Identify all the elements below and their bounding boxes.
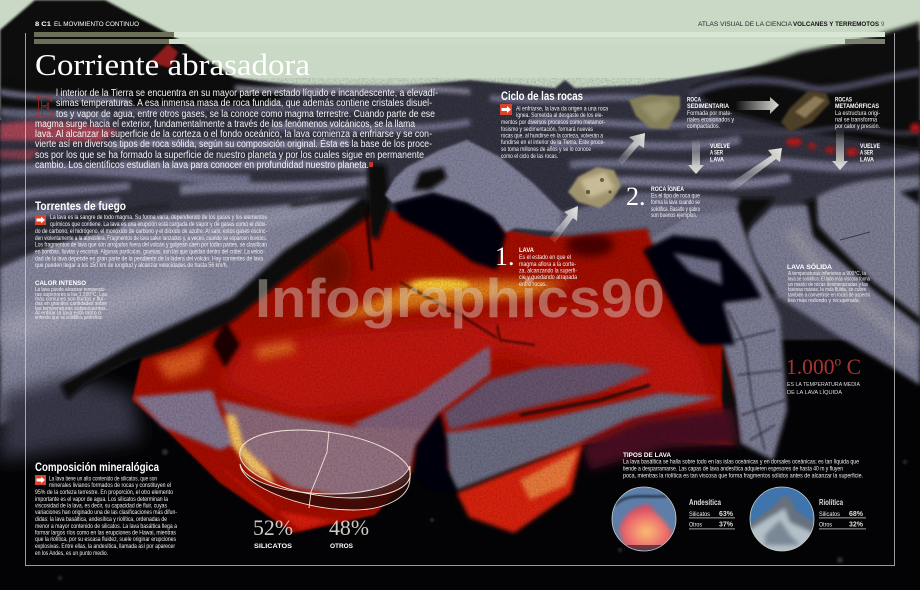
panel: tipos de lava: TIPOS DE LAVA: [623, 452, 672, 459]
central dome gray: [385, 140, 563, 233]
panel: composicion mineralogica: didas: la lava basáltica, andesítica y riolítica, ordenadas de: [35, 516, 167, 523]
label: roca sedimentaria: Formada por mate-: [687, 110, 732, 117]
watermark: Infographics90: [255, 267, 665, 329]
panel: lava solida: LAVA SÓLIDA: [787, 263, 833, 271]
crust center: [220, 347, 489, 500]
label: roca ignea: forma la lava cuando se: [651, 199, 700, 206]
glowing red spots right: [786, 123, 920, 156]
table: andesitica: [689, 498, 735, 529]
panel: ciclo de las rocas: Ciclo de las rocas: [501, 89, 583, 103]
label: lava: 1.: [495, 242, 514, 271]
label: vuelve a ser lava 1: A SER: [710, 150, 723, 156]
label: lava: magma aflora a la corte-: [519, 261, 576, 268]
panel: lava solida: también a convertirse en rocas de aspecto: [788, 292, 870, 298]
table: andesitica: Otros: [689, 522, 702, 528]
right rope above cavity: [560, 192, 740, 238]
pie top: [235, 420, 415, 508]
table: andesitica: 63%: [719, 511, 734, 518]
table: riolitica: Silicatos: [819, 511, 840, 518]
icon: arrow badge: [35, 475, 46, 485]
panel: calor intenso: las temperaturas subsecuentes.: [35, 306, 107, 312]
brighter red lower: [200, 450, 370, 530]
black lobe edge left: [60, 196, 378, 400]
cavity red: [132, 208, 734, 533]
table: andesitica: 37%: [719, 522, 734, 528]
panel: composicion mineralogica: Composición mineralógica: [35, 460, 159, 474]
label: roca sedimentaria: riales erosionados y: [687, 116, 735, 124]
label: rocas metamorficas: nal se transforma: [835, 116, 877, 124]
panel: ciclo de las rocas: Al enfriarse, la lava da origen a una roca: [516, 106, 608, 112]
label: lava: za, alcanzando la superfi-: [519, 268, 577, 274]
label: roca sedimentaria: SEDIMENTARIA: [687, 103, 729, 110]
light rope stripes: [0, 72, 920, 222]
pie labels: 52%: [253, 515, 293, 540]
panel: tipos de lava: La lava basáltica se halla sobre todo en las islas oceánicas y en dorsales oceánicas; es tan líquida que: [623, 458, 859, 466]
table: riolitica: Otros: [819, 522, 832, 528]
label: rocas metamorficas: por calor y presión.: [835, 123, 880, 130]
table: andesitica: Silicatos: [689, 511, 710, 518]
pie labels: [253, 515, 369, 550]
panel: torrentes de fuego: La lava es la sangre de todo magma. Su forma varía, dependiendo de los gases y los elementos: [50, 214, 267, 221]
panel: lava solida: liso más redondo y recuperada.: [788, 298, 860, 304]
panel: torrentes de fuego: do de carbono, el hidrógeno, el monóxido de carbono y el dióxido de azufre. Al salir, estos gases escinc-: [35, 228, 267, 235]
rock: ignea: [568, 167, 621, 208]
label: vuelve a ser lava 1: VUELVE: [710, 143, 730, 150]
black cracks: [366, 210, 535, 345]
label: lava: [495, 242, 577, 288]
pie labels: SILICATOS: [254, 543, 292, 550]
label: vuelve a ser lava 2: VUELVE: [860, 143, 880, 150]
label: vuelve a ser lava 1: LAVA: [710, 156, 724, 164]
arrow: metamorfica vuelve a lava: [832, 130, 848, 170]
label: roca ignea: 2.: [626, 182, 646, 211]
panel: tipos de lava: tiende a desparramarse. Las capas de lava andesítica adquieren espesores de hasta 40 m y fluyen: [623, 466, 843, 472]
panel: torrentes de fuego: químicos que contiene. La lava es una erupción está cargada de vapor y de gases como el dióxi-: [50, 221, 267, 228]
table: riolitica: Riolítica: [819, 498, 843, 507]
arrow: ignea to metamorfica: [726, 148, 782, 192]
arrow: ignea to sedimentaria: [617, 133, 645, 165]
lower red lava patch: [457, 443, 583, 533]
orange glow left: [155, 345, 208, 380]
red streak on mountain: [150, 44, 178, 68]
panel: lava solida: un manto de rocas desmenuzadas y las: [788, 282, 868, 288]
title: Corriente abrasadora: [35, 47, 310, 82]
label: rocas metamorficas: METAMÓRFICAS: [835, 102, 879, 110]
panel: tipos de lava: [623, 452, 863, 480]
panel: calor intenso: más comunes son fluidas y fluí-: [35, 296, 105, 302]
label: roca ignea: son buenos ejemplos.: [651, 212, 697, 219]
pie divider: [309, 431, 329, 508]
left pink glow streak: [0, 121, 120, 142]
dark red shadow: [566, 233, 614, 257]
label: roca sedimentaria: compactados.: [687, 123, 720, 130]
panel: torrentes de fuego: dad de la lava depende en gran parte de la pendiente de la ladera del volcán. Hay corrientes de lava: [35, 256, 263, 262]
lobe A shadow bottom: [722, 345, 745, 455]
intro paragraph: vierte así en diversos tipos de roca sólida, según su composición original. Ésta es la base de los proce-: [35, 137, 432, 150]
header left: section label: 8 C1: [35, 22, 52, 28]
sky: [0, 0, 920, 120]
callout: 1000 degrees: [786, 354, 861, 396]
table: riolitica: [819, 498, 866, 529]
icon: arrow badge: [35, 215, 46, 225]
yellow glow: [330, 280, 570, 322]
label: lava: Es el estado en que el: [519, 254, 571, 261]
label: lava: entre rocas.: [519, 281, 547, 288]
panel: ciclo de las rocas: fosismo y sedimentación, formará nuevas: [501, 126, 593, 133]
table: andesitica: Andesítica: [689, 498, 721, 507]
panel: tipos de lava: poca, mientras la riolítica es tan viscosa que forma fragmentos sólidos antes de alcanzar la superficie.: [623, 472, 863, 480]
intro paragraph: cambio. Los científicos estudian la lava para conocer en profundidad nuestro planeta.: [35, 160, 369, 171]
header bars: [34, 32, 885, 44]
panel: ciclo de las rocas: so toma millones de años y se lo conoce: [501, 146, 591, 153]
gap A-B: [733, 198, 776, 300]
pie labels: OTROS: [330, 543, 353, 550]
label: rocas metamorficas: ROCAS: [835, 96, 852, 104]
header left: section label: EL MOVIMIENTO CONTINUO: [54, 22, 139, 28]
intro paragraph: l interior de la Tierra se encuentra en su mayor parte en estado líquido e incandescente, a elevadí-: [56, 88, 438, 99]
panel: torrentes de fuego: Los fragmentos de lava que son arrojados fuera del volcán y golpean caen por todas partes, se clasifican: [35, 242, 267, 248]
panel: composicion mineralogica: minerales livianos formados de rocas y constituyen el: [49, 482, 171, 489]
arrow: sedimentaria vuelve a lava: [688, 140, 704, 174]
arrow: lava to ignea: [549, 206, 578, 243]
dome black underside: [393, 193, 506, 270]
drop cap: E: [35, 88, 55, 124]
panel: ciclo de las rocas: fundirse en el interior de la Tierra. Este proce-: [501, 139, 605, 146]
intro paragraph: simas temperaturas. A esa inmensa masa de roca fundida, que además contiene cristales disuel-: [56, 98, 432, 109]
panel: composicion mineralogica: viscosidad de la lava, es decir, su capacidad de fluir, cuyas: [35, 502, 167, 510]
table: riolitica: 68%: [849, 511, 864, 518]
crust right lower: [444, 393, 718, 490]
panel: calor intenso: CALOR INTENSO: [35, 280, 86, 287]
rock: sedimentaria: [629, 95, 680, 129]
panel: calor intenso: ras superiores a los 1.200°C. Las: [35, 292, 107, 298]
label: vuelve a ser lava 2: A SER: [860, 150, 873, 156]
table: riolitica: 32%: [849, 522, 864, 528]
lobe C far right: [815, 176, 920, 320]
right dark ridge: [690, 22, 920, 150]
label: roca ignea: ROCA ÍGNEA: [651, 185, 684, 193]
label: roca sedimentaria: ROCA: [687, 96, 701, 104]
left big gray lobe: [0, 198, 365, 425]
label: vuelve a ser lava 2: [860, 143, 880, 164]
header right: atlas label: [698, 22, 885, 28]
lobe A black inner: [643, 235, 762, 345]
panel: ciclo de las rocas: como el ciclo de las rocas.: [501, 153, 558, 160]
pie labels: 48%: [329, 515, 369, 540]
label: roca ignea: [626, 182, 700, 219]
speckled bottom: [58, 449, 907, 580]
label: roca sedimentaria: [687, 96, 735, 130]
panel: composicion mineralogica: explosivas. Entre ellas, la andesítica, llamada así por aparecer: [35, 543, 175, 550]
callout: 1000 degrees: 1.000º C: [786, 354, 861, 379]
panel: calor intenso: La lava puede alcanzar temperatu-: [35, 287, 106, 293]
panel: ciclo de las rocas: ígnea. Sometida al desgaste de los ele-: [516, 112, 603, 119]
crust lower right dark: [582, 408, 738, 470]
panel: composicion mineralogica: formar largos ríos como en las erupciones de Hawai, mientras: [35, 530, 176, 536]
left dark mountain: [0, 0, 300, 118]
panel: lava solida: [787, 263, 870, 304]
intro paragraph: tos y vapor de agua, entre otros gases, se la conoce como magma terrestre. Cuando parte de ese: [56, 109, 435, 120]
panel: torrentes de fuego: que pueden llegar a los 150 km de longitud y alcanzar velocidades de hasta 56 km/h.: [35, 262, 228, 269]
label: roca ignea: Es el tipo de roca que: [651, 192, 700, 200]
panel: composicion mineralogica: importante es el vapor de agua. Los silicatos determinan la: [35, 496, 168, 503]
chart: mineral composition pie: [235, 420, 415, 510]
panel: ciclo de las rocas: mentos por diversos procesos como metamor-: [501, 119, 605, 126]
arrow: sedimentaria to metamorfica: [735, 97, 779, 114]
intro paragraph: [35, 88, 438, 171]
label: vuelve a ser lava 1: [710, 143, 730, 164]
black column: [367, 163, 390, 240]
header right: atlas label: 9: [881, 22, 885, 28]
rope lava dark band: [0, 40, 920, 340]
panel: torrentes de fuego: [35, 199, 267, 269]
panel: calor intenso: Al enfriar la lava está tanto o: [35, 310, 101, 316]
lobe A: [650, 210, 787, 460]
intro paragraph: sos por los que se ha formado la superficie de nuestro planeta y por los cuales sigue en permanente: [35, 150, 424, 161]
panel: composicion mineralogica: [35, 460, 177, 557]
panel: lava solida: lava se solidifica. El lado más viscoso forma: [788, 276, 870, 282]
label: lava: LAVA: [519, 247, 534, 254]
panel: torrentes de fuego: en bombas, lluvias y escorias. Algunas partículas, gruesas, son las que quedan dentro del cráter. La veloci-: [35, 248, 265, 256]
panel: ciclo de las rocas: [500, 89, 608, 160]
header right: atlas label: VOLCANES Y TERREMOTOS: [793, 22, 879, 28]
left lobe shade lower: [0, 375, 140, 460]
rock: metamorfica: [781, 91, 830, 132]
icon: arrow badge: [500, 104, 512, 115]
panel: lava solida: buenas masas, la más fluida, se cubre: [788, 287, 866, 293]
panel: torrentes de fuego: den violentamente a la atmósfera. Fragmentos de lava salen lanzados y, a veces, cuando se esparcen llovidos.: [35, 235, 267, 242]
callout: 1000 degrees: ES LA TEMPERATURA MEDIA: [787, 382, 860, 388]
panel: calor intenso: [35, 280, 107, 321]
header right: atlas label: ATLAS VISUAL DE LA CIENCIA: [698, 22, 792, 28]
black gap center: [412, 412, 458, 495]
label: rocas metamorficas: [835, 96, 880, 130]
panel: composicion mineralogica: La lava tiene un alto contenido de silicatos, que son: [49, 476, 157, 482]
crust right upper: [444, 363, 652, 430]
intro paragraph: magma surge hacia el exterior, fundamentalmente a través de los fenómenos volcánicos, se la llama: [35, 119, 415, 130]
panel: composicion mineralogica: en los Andes, es un punto medio.: [35, 550, 108, 557]
lobe B: [747, 205, 920, 385]
icon: andesitic lava circle: [612, 486, 676, 552]
gap B-C: [803, 198, 920, 332]
label: rocas metamorficas: La estructura origi-: [835, 110, 880, 117]
panel: torrentes de fuego: Torrentes de fuego: [35, 199, 126, 213]
panel: composicion mineralogica: 95% de la corteza terrestre. En proporción, el otro elemento: [35, 489, 173, 496]
label: roca ignea: solidifica. Basalto y gabro: [651, 206, 700, 213]
panel: composicion mineralogica: variaciones han originado una de las clasificaciones más difun-: [35, 509, 177, 516]
panel: ciclo de las rocas: rocas que, al hundirse en la corteza, volverán a: [501, 132, 603, 140]
label: lava: cie y quedando atrapada: [519, 274, 577, 281]
callout: 1000 degrees: DE LA LAVA LÍQUIDA: [787, 389, 842, 396]
crust left: [134, 390, 236, 450]
lobe A cracks: [728, 310, 785, 450]
panel: lava solida: A temperaturas inferiores a 900°C, la: [788, 271, 866, 277]
intro paragraph: lava. Al alcanzar la superficie de la corteza o el fondo oceánico, la lava comienza a enfriarse y se con-: [35, 129, 432, 140]
panel: calor intenso: das en grandes cantidades sobre: [35, 301, 107, 307]
panel: calor intenso: enfrente que se solidifica pedreñas.: [35, 315, 103, 321]
icon: rhyolitic mountain circle: [750, 486, 814, 552]
panel: composicion mineralogica: que la riolítica, por su escasa fluidez, suele originar erupciones: [35, 536, 176, 543]
panel: composicion mineralogica: menor a mayor contenido de silicatos. La lava basáltica llega a: [35, 523, 177, 530]
pie side: [240, 464, 410, 510]
label: vuelve a ser lava 2: LAVA: [860, 156, 874, 164]
glowing crust edge: [225, 415, 275, 485]
